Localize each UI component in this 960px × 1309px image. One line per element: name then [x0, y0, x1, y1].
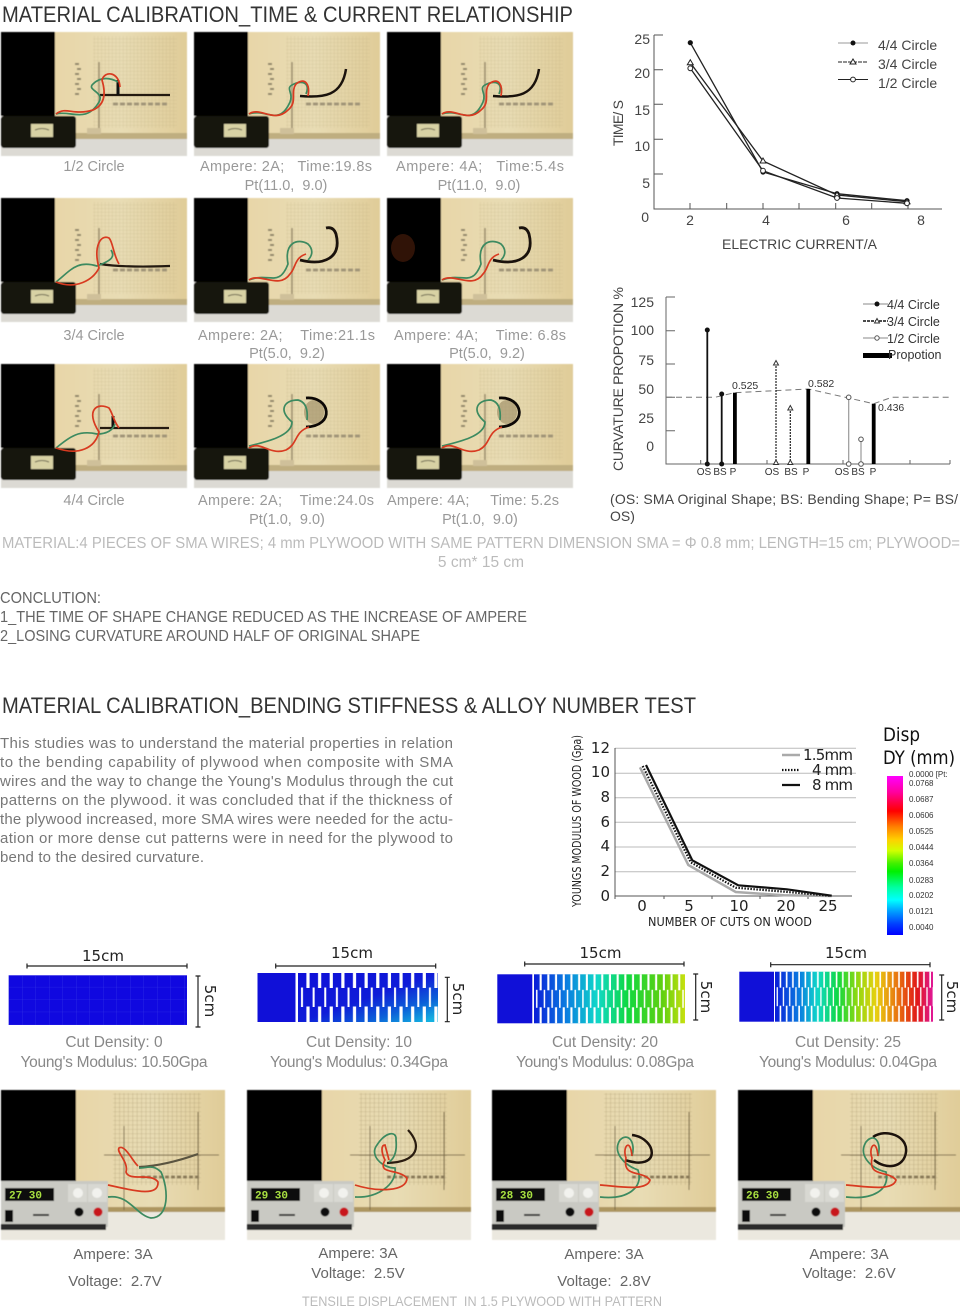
line chart: time vs electric current: 15 — [634, 102, 650, 118]
photo: 3/4 circle at 4A — [387, 198, 573, 322]
line chart: time vs electric current: 4 — [762, 212, 770, 228]
colour scale: displacement: 0.0444 — [909, 843, 934, 852]
body text: ation or more dense cut patterns were in need for the plywood to — [0, 830, 453, 847]
line chart: youngs modulus: 25 — [818, 897, 838, 915]
body text: patterns on the plywood. it was concluded that if the thickness of — [0, 792, 453, 809]
legend — [838, 37, 937, 91]
axis label: time: TIME/ S — [610, 100, 626, 146]
material note — [2, 535, 960, 571]
legend: 3/4 Circle — [887, 315, 940, 329]
axis label: modulus: YOUNGS MODULUS OF WOOD (Gpa) — [570, 735, 584, 908]
line chart: youngs modulus — [570, 735, 856, 929]
caption: 3/4 circle: 3/4 Circle — [63, 328, 125, 344]
legend: 4/4 Circle — [887, 298, 940, 312]
panel: cut density 0 — [9, 947, 219, 1071]
caption: test at 2.8V — [557, 1246, 651, 1290]
lollipop chart: curvature proportion: 0.436 — [878, 402, 904, 414]
caption: test at 2.5V: Ampere: 3A — [318, 1245, 398, 1262]
caption: 4/4 circle 2A: Pt(1.0, 9.0) — [249, 512, 325, 528]
photo: test at 2.6V: 26 30 — [746, 1190, 779, 1202]
legend: 1/2 Circle — [878, 75, 937, 91]
line chart: youngs modulus: 0 — [600, 887, 610, 905]
line chart: youngs modulus: 8 — [600, 788, 610, 806]
panel: cut density 25: 15cm — [825, 944, 867, 962]
panel: cut density 0: 5cm — [201, 985, 219, 1017]
colour scale: displacement: 0.0768 — [909, 779, 934, 788]
body text: wires and the way to change the Young's Modulus through the cut — [0, 773, 454, 790]
caption: 3/4 circle 4A — [394, 328, 566, 362]
photo: 1/2 circle baseline — [1, 32, 187, 156]
line chart: youngs modulus: 10 — [591, 763, 610, 781]
body text: This studies was to understand the material properties in relation — [0, 735, 453, 752]
line chart: youngs modulus: 4 — [600, 837, 610, 855]
photo: test at 2.7V: 27 30 — [9, 1190, 42, 1202]
conclusion: 1_THE TIME OF SHAPE CHANGE REDUCED AS THE INCREASE OF AMPERE — [0, 609, 527, 626]
line chart: time vs electric current: 0 — [641, 209, 649, 225]
axis label: curvature: CURVATURE PROPOTION % — [610, 287, 626, 471]
caption: 3/4 circle 2A: Ampere: 2A; Time:21.1s — [198, 328, 375, 344]
panel: cut density 20: 5cm — [697, 981, 715, 1013]
legend: 1.5mm — [803, 746, 853, 764]
colour scale: displacement: 0.0525 — [909, 827, 934, 836]
series: 3/4 circle — [687, 60, 910, 204]
title: time and current relationship: MATERIAL CALIBRATION_TIME & CURRENT RELATIONSHIP — [2, 2, 573, 27]
caption: 1/2 circle 2A — [200, 159, 372, 194]
caption: 1/2 circle 2A: Ampere: 2A; Time:19.8s — [200, 159, 372, 175]
panel: cut density 10 — [258, 944, 467, 1071]
caption: 3/4 circle 4A: Ampere: 4A; Time: 6.8s — [394, 328, 566, 344]
axis label: cuts: NUMBER OF CUTS ON WOOD — [648, 915, 812, 929]
conclusion: CONCLUTION: — [0, 590, 101, 607]
material note: 5 cm* 15 cm — [438, 554, 524, 571]
line chart: youngs modulus: 10 — [729, 897, 749, 915]
panel: cut density 20 — [497, 944, 715, 1071]
legend: Propotion — [888, 348, 942, 362]
colour scale: displacement: 0.0283 — [909, 876, 934, 885]
photo: 3/4 circle at 2A — [194, 198, 380, 322]
lollipop chart: curvature proportion: BS — [851, 467, 865, 478]
panel: cut density 20: 15cm — [580, 944, 621, 962]
line chart: youngs modulus: 12 — [591, 739, 610, 757]
legend — [863, 298, 942, 362]
photo: test at 2.7V — [1, 1090, 225, 1240]
panel: cut density 10: 5cm — [449, 983, 467, 1015]
series: 1/2 circle — [688, 66, 909, 206]
lollipop chart: curvature proportion: 25 — [638, 410, 654, 426]
photo: 1/2 circle at 4A — [387, 32, 573, 156]
line chart: time vs electric current: 2 — [686, 212, 694, 228]
stems: 4/4 circle — [705, 328, 724, 466]
panel: cut density 0: 15cm — [82, 947, 124, 965]
conclusion: 2_LOSING CURVATURE AROUND HALF OF ORIGINAL SHAPE — [0, 628, 420, 645]
proportion bars — [733, 389, 876, 464]
panel: cut density 25: Cut Density: 25 — [795, 1034, 901, 1051]
lollipop chart: curvature proportion: OS — [697, 467, 712, 478]
lollipop chart: curvature proportion: 0.525 — [732, 380, 758, 392]
line chart: time vs electric current: 10 — [634, 138, 650, 154]
colour scale: displacement: 0.0000 [Pt: — [909, 770, 948, 779]
series: 4/4 circle — [688, 40, 910, 203]
photo: 4/4 circle at 2A — [194, 364, 380, 488]
caption: 1/2 circle 2A: Pt(11.0, 9.0) — [245, 178, 327, 194]
caption: 3/4 circle 4A: Pt(5.0, 9.2) — [449, 346, 525, 362]
photo: test at 2.5V — [247, 1090, 471, 1240]
colour scale: displacement: 0.0040 — [909, 923, 934, 932]
lollipop chart: curvature proportion: 100 — [631, 322, 654, 338]
photo: 4/4 circle at 4A — [387, 364, 573, 488]
panel: cut density 10: Young's Modulus: 0.34Gpa — [270, 1054, 448, 1071]
panel: cut density 10: 15cm — [331, 944, 373, 962]
line chart: time vs electric current: 8 — [917, 212, 925, 228]
lollipop chart: curvature proportion: OS — [835, 467, 850, 478]
body text — [0, 735, 454, 866]
caption: 4/4 circle 4A: Pt(1.0, 9.0) — [442, 512, 518, 528]
conclusion — [0, 590, 527, 645]
caption: 1/2 circle 4A — [396, 159, 564, 194]
caption: test at 2.7V: Voltage: 2.7V — [68, 1273, 162, 1290]
caption: test at 2.5V — [311, 1245, 405, 1282]
body text: the plywood increased, more SMA wires were needed for the actu- — [0, 811, 453, 828]
panel: cut density 20: Young's Modulus: 0.08Gpa — [516, 1054, 694, 1071]
stems: 3/4 circle — [774, 360, 793, 464]
series: 1.5 mm — [640, 767, 832, 896]
heading: bending stiffness: MATERIAL CALIBRATION_BENDING STIFFNESS & ALLOY NUMBER TEST — [2, 693, 696, 718]
panel: cut density 10: Cut Density: 10 — [306, 1034, 412, 1051]
panel: cut density 20: Cut Density: 20 — [552, 1034, 658, 1051]
legend: 1/2 Circle — [887, 332, 940, 346]
photo: test at 2.6V — [738, 1090, 960, 1240]
panel: cut density 0: Young's Modulus: 10.50Gpa — [20, 1054, 208, 1071]
colour scale: displacement: 0.0364 — [909, 859, 934, 868]
caption: test at 2.6V: Ampere: 3A — [809, 1246, 889, 1263]
line chart: time vs electric current: 6 — [842, 212, 850, 228]
photo: test at 2.8V: 28 30 — [500, 1190, 533, 1202]
caption: test at 2.6V: Voltage: 2.6V — [802, 1265, 896, 1282]
lollipop chart: curvature proportion — [610, 287, 950, 478]
caption: test at 2.8V: Voltage: 2.8V — [557, 1273, 651, 1290]
caption: test at 2.8V: Ampere: 3A — [564, 1246, 644, 1263]
lollipop chart: curvature proportion: 125 — [631, 294, 654, 310]
lollipop chart: curvature proportion: P — [870, 467, 877, 478]
legend: 3/4 Circle — [878, 56, 937, 72]
line chart: youngs modulus: 5 — [684, 897, 694, 915]
photo: 3/4 circle baseline — [1, 198, 187, 322]
colour scale: displacement: Disp — [883, 724, 920, 746]
colour scale: displacement: 0.0606 — [909, 811, 934, 820]
caption: 4/4 circle 2A — [198, 493, 374, 528]
caption: test at 2.7V: Ampere: 3A — [73, 1246, 153, 1263]
caption: 4/4 circle 4A — [387, 493, 559, 528]
caption: 3/4 circle 2A: Pt(5.0, 9.2) — [249, 346, 325, 362]
caption: 1/2 circle: 1/2 Circle — [63, 159, 125, 175]
caption: 4/4 circle: 4/4 Circle — [63, 493, 125, 509]
photo: 1/2 circle at 2A — [194, 32, 380, 156]
caption: 3/4 circle 2A — [198, 328, 375, 362]
caption: test at 2.6V — [802, 1246, 896, 1282]
caption: 1/2 circle 4A: Ampere: 4A; Time:5.4s — [396, 159, 564, 175]
lollipop chart: curvature proportion: 0 — [646, 438, 654, 454]
line chart: youngs modulus: 2 — [600, 862, 610, 880]
panel: cut density 0: Cut Density: 0 — [65, 1034, 163, 1051]
photo: test at 2.8V — [492, 1090, 716, 1240]
note: legend abbreviations: OS) — [610, 508, 635, 524]
body text: to the bending capability of plywood when composite with SMA — [0, 754, 453, 771]
line chart: time vs electric current: 20 — [634, 65, 650, 81]
lollipop chart: curvature proportion: P — [803, 467, 810, 478]
lollipop chart: curvature proportion: P — [730, 467, 737, 478]
lollipop chart: curvature proportion: BS — [713, 467, 727, 478]
legend — [782, 746, 853, 794]
lollipop chart: curvature proportion: 0.582 — [808, 378, 834, 390]
caption: test at 2.7V — [68, 1246, 162, 1290]
lollipop chart: curvature proportion: OS — [765, 467, 780, 478]
series: 8 mm — [646, 765, 832, 896]
panel: cut density 25: Young's Modulus: 0.04Gpa — [759, 1054, 937, 1071]
series: 4 mm — [643, 766, 830, 896]
lollipop chart: curvature proportion: BS — [784, 467, 798, 478]
lollipop chart: curvature proportion: 75 — [638, 352, 654, 368]
line chart: time vs electric current: 5 — [642, 175, 650, 191]
caption: 4/4 circle 4A: Ampere: 4A; Time: 5.2s — [387, 493, 559, 509]
line chart: youngs modulus: 6 — [600, 813, 610, 831]
colour scale: displacement — [883, 724, 955, 935]
caption: test at 2.5V: Voltage: 2.5V — [311, 1265, 405, 1282]
colour scale: displacement: 0.0121 — [909, 907, 934, 916]
photo: test at 2.5V: 29 30 — [255, 1190, 288, 1202]
body text: bend to the desired curvature. — [0, 849, 204, 866]
colour scale: displacement: 0.0687 — [909, 795, 934, 804]
stems: 1/2 circle — [846, 395, 863, 466]
line chart: time vs electric current: 25 — [634, 31, 650, 47]
legend: 4/4 Circle — [878, 37, 937, 53]
colour scale: displacement: 0.0202 — [909, 891, 934, 900]
note: legend abbreviations — [610, 491, 958, 524]
caption: 4/4 circle 2A: Ampere: 2A; Time:24.0s — [198, 493, 374, 509]
footer caption: TENSILE DISPLACEMENT IN 1.5 PLYWOOD WITH PATTERN — [302, 1293, 662, 1309]
caption: 1/2 circle 4A: Pt(11.0, 9.0) — [438, 178, 520, 194]
line chart: time vs electric current — [610, 31, 942, 252]
note: legend abbreviations: (OS: SMA Original Shape; BS: Bending Shape; P= BS/ — [610, 491, 958, 507]
panel: cut density 25 — [739, 944, 960, 1071]
lollipop chart: curvature proportion: 50 — [638, 381, 654, 397]
axis label: current: ELECTRIC CURRENT/A — [722, 236, 878, 252]
photo: 4/4 circle baseline — [1, 364, 187, 488]
legend: 8 mm — [812, 776, 853, 794]
line chart: youngs modulus: 20 — [776, 897, 796, 915]
legend: 4 mm — [812, 761, 853, 779]
line chart: youngs modulus: 0 — [637, 897, 647, 915]
